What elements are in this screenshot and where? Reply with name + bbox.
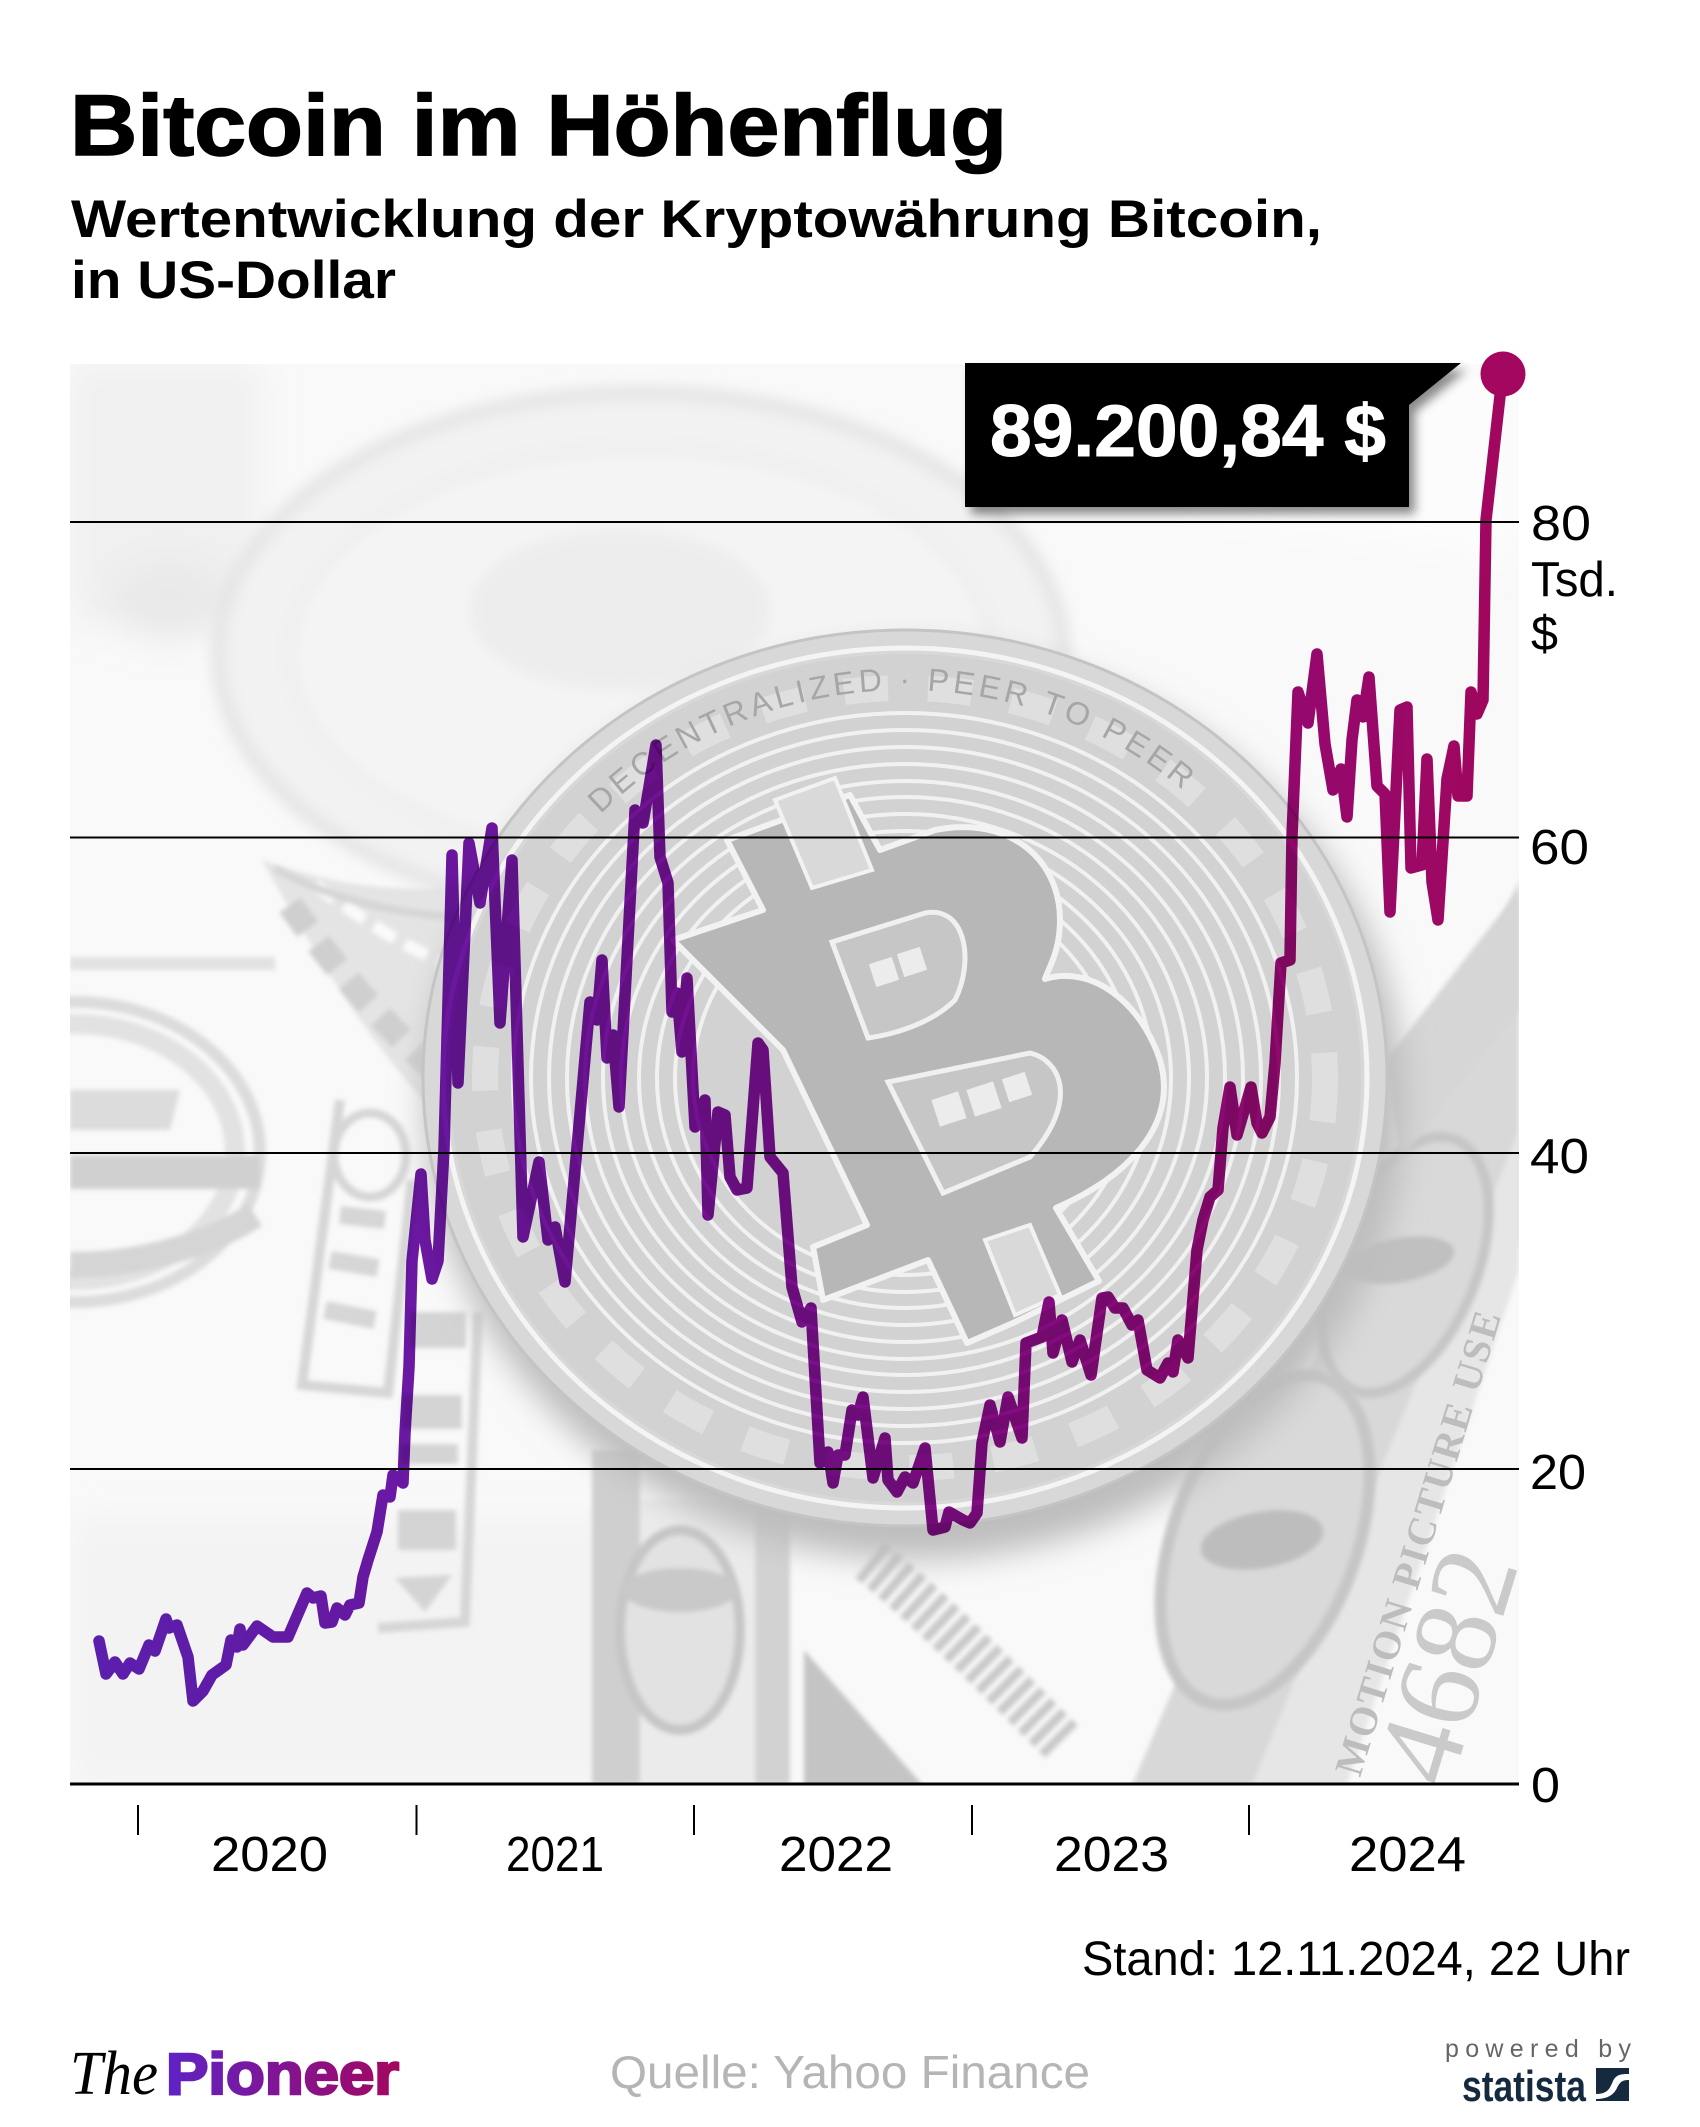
right bill band: 4682 (1350, 1534, 1544, 1798)
background photo: coins and dollar bills (70, 364, 1519, 1782)
x axis year labels: 2021 (506, 1828, 604, 1882)
end point marker (1480, 352, 1526, 396)
x axis year labels (211, 1828, 1466, 1882)
right bill band: MOTION PICTURE USE (1326, 1304, 1510, 1781)
logo: The Pioneer (70, 2040, 399, 2108)
right bill band (1132, 884, 1519, 1782)
callout: latest value (965, 363, 1461, 507)
coin inscription: DECENTRALIZED · PEER TO PEER (588, 668, 1192, 812)
callout: latest value: 89.200,84 $ (990, 391, 1386, 472)
y axis labels: Tsd. (1531, 553, 1618, 607)
subtitle (71, 190, 1322, 310)
icon: statista mark (1596, 2068, 1629, 2101)
title: Bitcoin im Höhenflug (70, 78, 1007, 174)
y axis labels: 0 (1531, 1759, 1560, 1813)
x axis baseline (70, 1782, 1519, 1786)
y axis labels: 40 (1530, 1130, 1589, 1184)
source: Quelle: Yahoo Finance (610, 2046, 1090, 2098)
subtitle: in US-Dollar (71, 251, 396, 310)
logo: powered by statista (1445, 2035, 1632, 2111)
logo: The Pioneer: The (70, 2040, 158, 2108)
bitcoin B symbol (673, 778, 1164, 1343)
subtitle: Wertentwicklung der Kryptowährung Bitcoin, (71, 190, 1322, 249)
coin stack side (264, 862, 460, 1096)
x axis year labels: 2023 (1054, 1828, 1169, 1882)
main coin shadow (425, 650, 1405, 1560)
line chart: Bitcoin price (99, 374, 1503, 1701)
left bill: seal (70, 956, 276, 1310)
x axis year labels: 2024 (1349, 1828, 1466, 1882)
y axis labels: 60 (1530, 821, 1589, 875)
signature on bill (870, 1560, 1065, 1745)
x axis ticks (138, 1805, 1249, 1835)
logo: The Pioneer: Pioneer (166, 2042, 399, 2107)
y axis labels (1530, 497, 1618, 1813)
logo: powered by statista: powered by (1445, 2035, 1632, 2063)
logo: powered by statista: statista (1462, 2062, 1586, 2111)
horizontal grid lines (70, 522, 1519, 1469)
x axis year labels: 2022 (779, 1828, 893, 1882)
back coin (218, 392, 1064, 916)
left bill: ONE column (302, 1100, 478, 1628)
y axis labels: 80 (1531, 497, 1591, 551)
x axis year labels: 2020 (211, 1828, 328, 1882)
date note: Stand: 12.11.2024, 22 Uhr (1082, 1933, 1630, 1986)
lower bill: oval and column (592, 1450, 927, 1790)
y axis labels: $ (1531, 607, 1558, 661)
y axis labels: 20 (1530, 1446, 1586, 1500)
main bitcoin coin (422, 628, 1386, 1524)
